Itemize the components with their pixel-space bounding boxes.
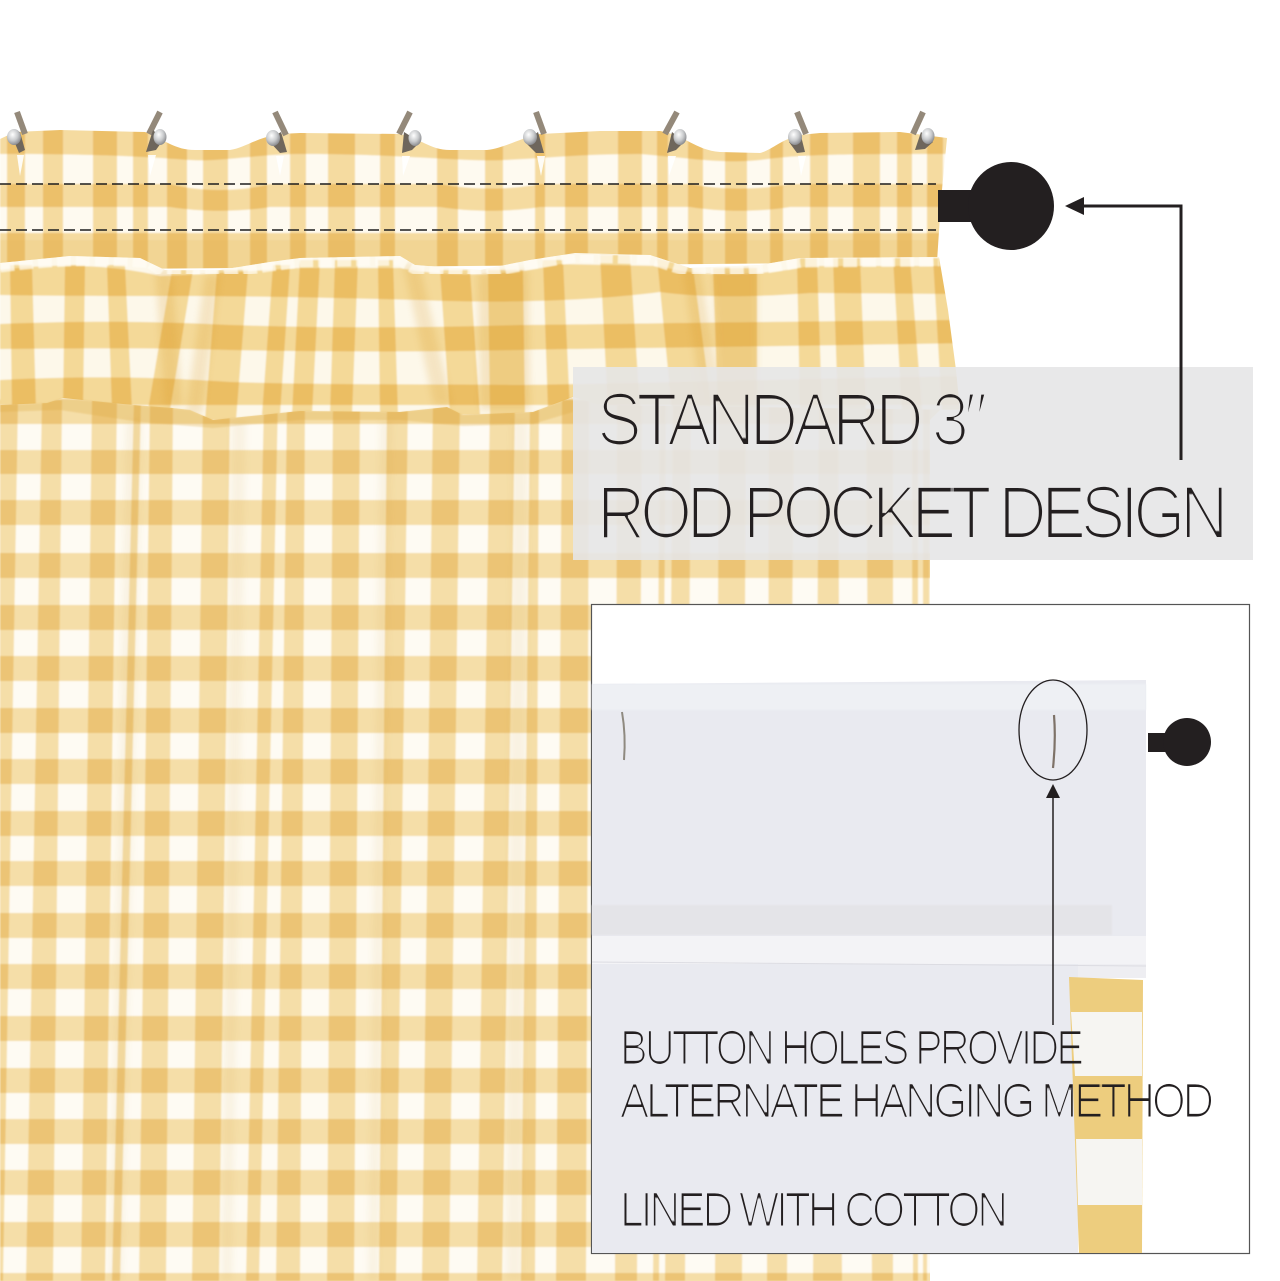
heading: rod pocket design: ROD POCKET DESIGN: [597, 471, 1224, 554]
hook 6: [665, 112, 686, 176]
text: button holes note: BUTTON HOLES PROVIDE: [620, 1022, 1082, 1075]
hook 8: [913, 112, 934, 150]
ruffle folds and shadows: [155, 262, 757, 414]
curtain hooks and rings: [7, 112, 934, 176]
ruffle horizontal stripes: [0, 264, 965, 405]
vertical gingham stripes: [0, 400, 930, 1281]
ruffle of curtain: [0, 250, 965, 425]
lining photo: [592, 680, 1146, 1253]
heading: standard 3 inch: STANDARD 3″: [597, 378, 986, 461]
header horizontal stripes: [0, 125, 960, 275]
text: alternate hanging note: ALTERNATE HANGING METHOD: [620, 1075, 1213, 1128]
curtain panel: yellow gingham body: [0, 395, 960, 1281]
horizontal gingham stripes: [0, 399, 960, 1281]
icon: curtain rod end with finial: [938, 162, 1054, 250]
gathered stitching line: [0, 256, 939, 273]
text: lined with cotton note: LINED WITH COTTON: [620, 1184, 1005, 1237]
arrow pointing to rod: [1065, 197, 1181, 460]
curtain fold shading: [110, 420, 528, 1281]
ruffle vertical stripes: [10, 255, 962, 420]
header vertical stripes: [7, 125, 943, 275]
dashed lines marking rod pocket: [0, 184, 936, 230]
icon: small rod end: [1148, 718, 1211, 766]
arrow to button hole: [1046, 784, 1060, 1025]
hook 1: [7, 112, 25, 176]
callout panel: standard rod pocket design: [573, 197, 1253, 560]
shadow under ruffle: [0, 397, 573, 428]
yellow gingham hem at lining edge: [1069, 977, 1143, 1253]
button hole left: [622, 712, 625, 760]
circle around button hole: [1019, 680, 1087, 780]
inset panel: curtain lining and button holes: [592, 604, 1250, 1254]
hook 4: [399, 112, 422, 176]
hook 3: [266, 112, 287, 176]
hook 7: [788, 112, 806, 176]
button hole right: [1053, 715, 1055, 768]
hook 5: [523, 112, 545, 176]
hook 2: [146, 112, 166, 176]
rod pocket header of curtain: [0, 125, 960, 275]
